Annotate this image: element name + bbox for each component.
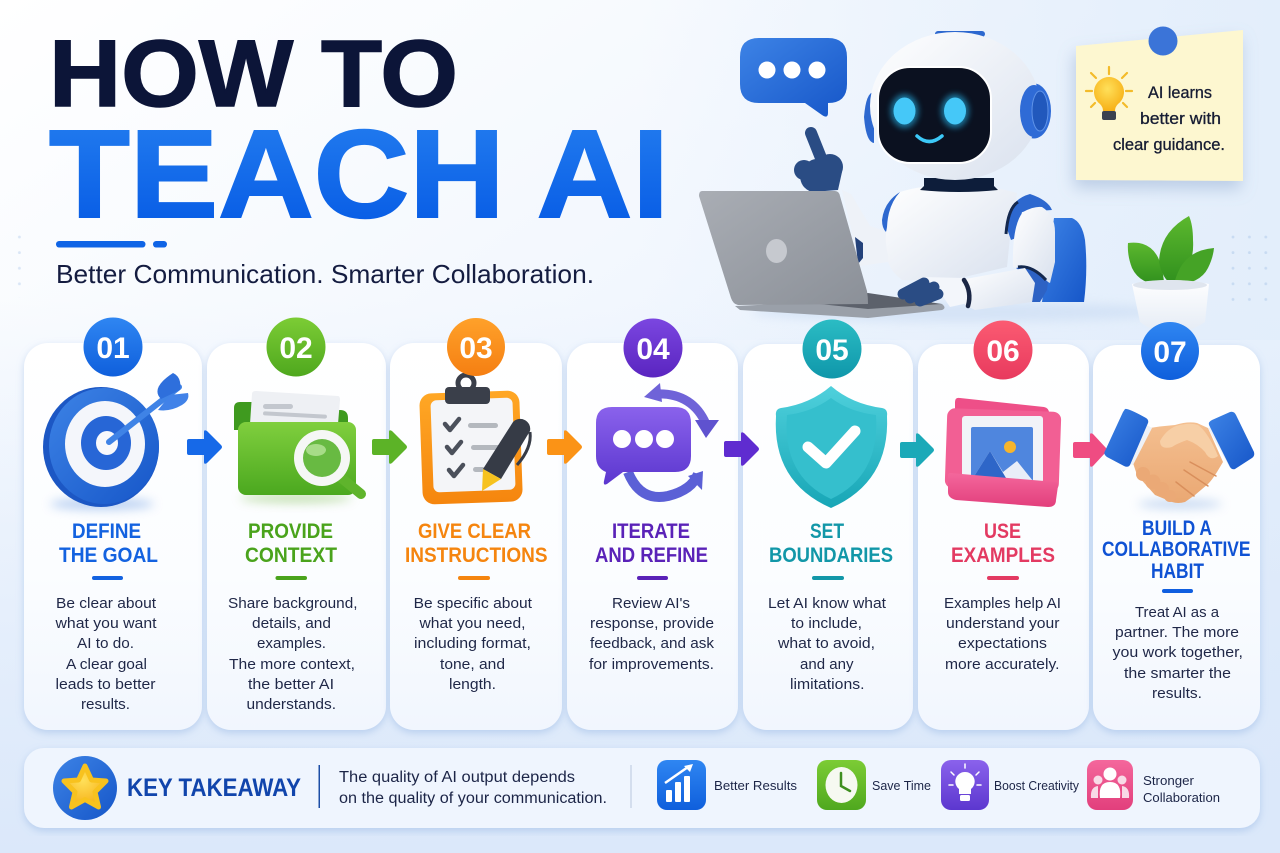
benefit: save time: Save Time <box>872 778 931 793</box>
heading <box>405 520 548 567</box>
arrow: step 6 to 7 <box>1073 433 1107 467</box>
body text: understands. <box>246 696 336 713</box>
heading <box>245 520 337 567</box>
heading: PROVIDE <box>248 520 333 543</box>
body text: to include, <box>791 615 862 632</box>
body text: examples. <box>257 635 326 652</box>
note text: AI learns <box>1148 84 1212 102</box>
icon: folder with magnifier <box>234 391 361 503</box>
panel: step 7 build a collaborative habit <box>1093 322 1260 730</box>
body text: AI to do. <box>77 635 134 652</box>
robot face screen <box>878 67 991 163</box>
arrow: step 1 to 2 <box>187 430 222 464</box>
number badge 03 <box>447 318 505 376</box>
heading: GIVE CLEAR <box>418 520 531 543</box>
number badge 03: 03 <box>459 332 493 365</box>
body text: Treat AI as a <box>1135 604 1220 621</box>
icon: target <box>43 373 188 510</box>
body text: you work together, <box>1112 644 1243 661</box>
icon: light bulb <box>1086 67 1132 120</box>
heading: THE GOAL <box>59 544 158 567</box>
heading: INSTRUCTIONS <box>405 544 548 567</box>
panel: step 6 use examples <box>918 320 1089 730</box>
heading <box>769 520 893 567</box>
robot left arm <box>842 190 888 266</box>
panel: step 1 define the goal <box>24 318 202 730</box>
body text: feedback, and ask <box>590 635 714 652</box>
icon: star badge <box>53 756 117 820</box>
panel: step 5 set boundaries <box>743 320 913 730</box>
benefit: stronger collaboration: Stronger <box>1143 773 1195 788</box>
benefit: boost creativity <box>941 760 1079 810</box>
robot head <box>864 31 1051 180</box>
heading: ITERATE <box>612 520 690 543</box>
laptop <box>699 191 944 318</box>
number badge 05: 05 <box>815 334 849 367</box>
body text: details, and <box>252 615 331 632</box>
benefit: save time <box>817 760 931 810</box>
robot pointing hand <box>794 133 843 192</box>
arrow: step 5 to 6 <box>900 433 934 467</box>
arrow: step 3 to 4 <box>547 430 582 464</box>
note text <box>1113 84 1225 154</box>
body text: results. <box>1152 685 1202 702</box>
heading: CONTEXT <box>245 544 337 567</box>
body text <box>414 595 533 693</box>
body text <box>944 595 1061 673</box>
heading <box>595 520 708 567</box>
body text <box>54 595 157 713</box>
number badge 02: 02 <box>279 332 313 365</box>
takeaway text: The quality of AI output depends <box>339 769 575 786</box>
number badge 07 <box>1141 322 1199 380</box>
heading: SET <box>810 520 844 543</box>
body text: Share background, <box>228 595 358 612</box>
plant <box>1128 216 1214 334</box>
title accent line <box>56 241 167 248</box>
body text <box>1112 604 1243 702</box>
heading <box>1102 517 1250 583</box>
icon: clipboard with pen <box>419 375 530 505</box>
number badge 01 <box>84 318 142 376</box>
heading: BUILD A <box>1142 517 1212 540</box>
panel: step 4 iterate and refine <box>567 318 738 730</box>
benefit: stronger collaboration <box>1087 760 1220 810</box>
takeaway text <box>339 769 607 807</box>
arrow: step 2 to 3 <box>372 430 407 464</box>
title <box>49 21 669 244</box>
arrow: step 4 to 5 <box>724 432 759 466</box>
heading: USE <box>984 520 1021 543</box>
number badge 06 <box>974 320 1032 380</box>
body text: results. <box>81 696 130 713</box>
number badge 07: 07 <box>1153 336 1187 369</box>
pin <box>1148 26 1178 56</box>
benefit: better results: Better Results <box>714 778 797 793</box>
body text: Examples help AI <box>944 595 1061 612</box>
body text: Be clear about <box>56 595 157 612</box>
body text: partner. The more <box>1115 624 1239 641</box>
body text: leads to better <box>56 676 156 693</box>
body text <box>228 595 358 713</box>
body text: understand your <box>946 615 1060 632</box>
body text: The more context, <box>229 656 355 673</box>
title: TEACH AI <box>49 105 669 244</box>
number badge 04 <box>624 318 682 378</box>
body text: including format, <box>414 635 531 652</box>
number badge 06: 06 <box>986 335 1020 368</box>
benefit: better results <box>657 760 797 810</box>
number badge 01: 01 <box>96 332 130 365</box>
heading <box>59 520 158 567</box>
heading: HABIT <box>1151 560 1204 583</box>
number badge 02 <box>266 318 326 376</box>
body text: and any <box>800 656 854 673</box>
heading: BOUNDARIES <box>769 544 893 567</box>
icon: handshake <box>1104 409 1254 509</box>
body text: limitations. <box>790 676 864 693</box>
heading: EXAMPLES <box>951 544 1055 567</box>
panel: step 3 give clear instructions <box>390 318 562 730</box>
takeaway text: on the quality of your communication. <box>339 790 607 807</box>
icon: picture folder <box>945 398 1061 507</box>
body text: A clear goal <box>66 656 147 673</box>
robot body <box>882 178 1017 280</box>
heading: AND REFINE <box>595 544 708 567</box>
key takeaway heading: KEY TAKEAWAY <box>127 774 301 802</box>
body text: Be specific about <box>414 595 533 612</box>
heading: DEFINE <box>72 520 141 543</box>
body text: the better AI <box>248 676 334 693</box>
speech bubble <box>740 38 847 117</box>
illustration: robot at laptop <box>699 31 1170 322</box>
body text: more accurately. <box>945 656 1060 673</box>
robot right arm and hand <box>903 194 1055 310</box>
body text: for improvements. <box>589 656 714 673</box>
body text: expectations <box>958 635 1047 652</box>
panel: key takeaway <box>24 748 1260 828</box>
heading <box>951 520 1055 567</box>
body text: Review AI's <box>612 595 690 612</box>
icon: chat bubble with loop arrows <box>596 383 719 497</box>
body text: Let AI know what <box>768 595 887 612</box>
benefit: stronger collaboration: Collaboration <box>1143 790 1220 805</box>
number badge 05 <box>802 320 862 378</box>
note text: better with <box>1140 110 1221 128</box>
body text: what you want <box>54 615 157 632</box>
body text: what you need, <box>418 615 526 632</box>
chair <box>1042 218 1086 302</box>
body text <box>768 595 887 693</box>
subtitle: Better Communication. Smarter Collaboration. <box>56 259 594 289</box>
benefit: boost creativity: Boost Creativity <box>994 778 1079 793</box>
title: HOW TO <box>49 21 458 127</box>
body text: the smarter the <box>1124 665 1231 682</box>
body text: tone, and <box>440 656 505 673</box>
sticky note <box>1076 26 1243 181</box>
body text: what to avoid, <box>777 635 875 652</box>
icon: shield with check <box>776 386 887 508</box>
number badge 04: 04 <box>636 333 670 366</box>
note text: clear guidance. <box>1113 136 1225 154</box>
body text: length. <box>449 676 496 693</box>
body text <box>589 595 714 673</box>
body text: response, provide <box>590 615 714 632</box>
panel: step 2 provide context <box>207 318 386 730</box>
heading: COLLABORATIVE <box>1102 538 1250 561</box>
